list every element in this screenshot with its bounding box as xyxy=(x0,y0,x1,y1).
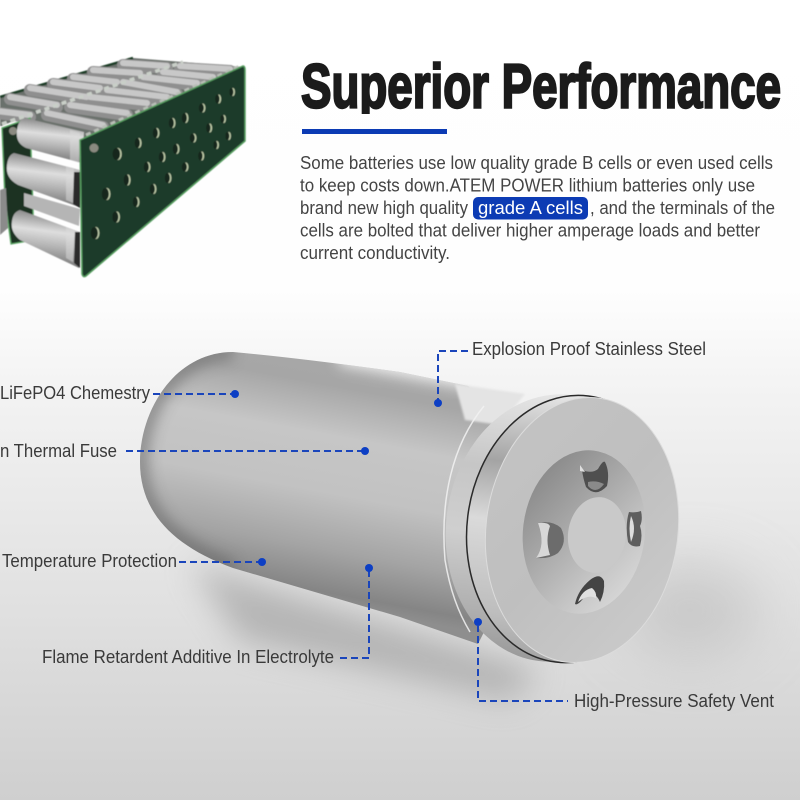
callout: Flame Retardent Additive In Electrolyte xyxy=(42,564,373,667)
vent hole bottom xyxy=(575,576,604,604)
description paragraph: cells are bolted that deliver higher amperage loads and better xyxy=(300,220,760,240)
pack front circuit board with holes xyxy=(80,66,245,277)
callout: Temperature Protection: Temperature Protection xyxy=(2,550,177,571)
description paragraph xyxy=(300,152,775,263)
callout: Flame Retardent Additive In Electrolyte: Flame Retardent Additive In Electrolyte xyxy=(42,646,334,667)
battery pack illustration xyxy=(0,58,245,277)
middle circuit board xyxy=(2,118,34,244)
cell shading overlays xyxy=(140,352,530,568)
pack front cells xyxy=(0,118,84,268)
description paragraph: to keep costs down.ATEM POWER lithium batteries only use xyxy=(300,174,755,196)
centre disc xyxy=(564,494,630,576)
callout: High-Pressure Safety Vent: High-Pressure Safety Vent xyxy=(574,690,775,711)
blue divider bar xyxy=(302,129,447,134)
middle board screw xyxy=(9,127,17,135)
description paragraph: brand new high quality xyxy=(300,197,469,218)
pack top cell rows xyxy=(0,63,230,127)
callout: Thermal Fuse: n Thermal Fuse xyxy=(0,440,117,461)
shoulder joining body to rim xyxy=(455,384,525,425)
description paragraph: current conductivity. xyxy=(300,242,450,263)
callout: Thermal Fuse xyxy=(0,440,369,461)
cell body xyxy=(140,352,500,644)
front rim with groove xyxy=(451,383,693,675)
vent hole left xyxy=(536,522,564,558)
rear rim xyxy=(430,382,680,674)
callout: Explosion Proof Stainless Steel xyxy=(434,338,706,407)
pack top base xyxy=(0,58,243,140)
terminals along front board xyxy=(86,66,240,135)
description paragraph: , and the terminals of the xyxy=(590,197,775,218)
terminals along middle board xyxy=(2,62,183,124)
cap face xyxy=(471,386,693,674)
callout: High-Pressure Safety Vent xyxy=(474,618,775,711)
lithium cell cylinder xyxy=(140,352,693,675)
vent hole right xyxy=(627,511,642,546)
vent hole top xyxy=(580,462,608,492)
callout: Explosion Proof Stainless Steel: Explosion Proof Stainless Steel xyxy=(472,338,706,359)
highlight rim line xyxy=(444,406,484,632)
floor shadow xyxy=(190,562,760,700)
pack top rear board edge xyxy=(0,58,133,97)
callout: LiFePO4 Chemestry: LiFePO4 Chemestry xyxy=(0,382,151,403)
highlight pill: grade A cells: grade A cells xyxy=(478,197,583,218)
recessed vent xyxy=(513,443,655,621)
